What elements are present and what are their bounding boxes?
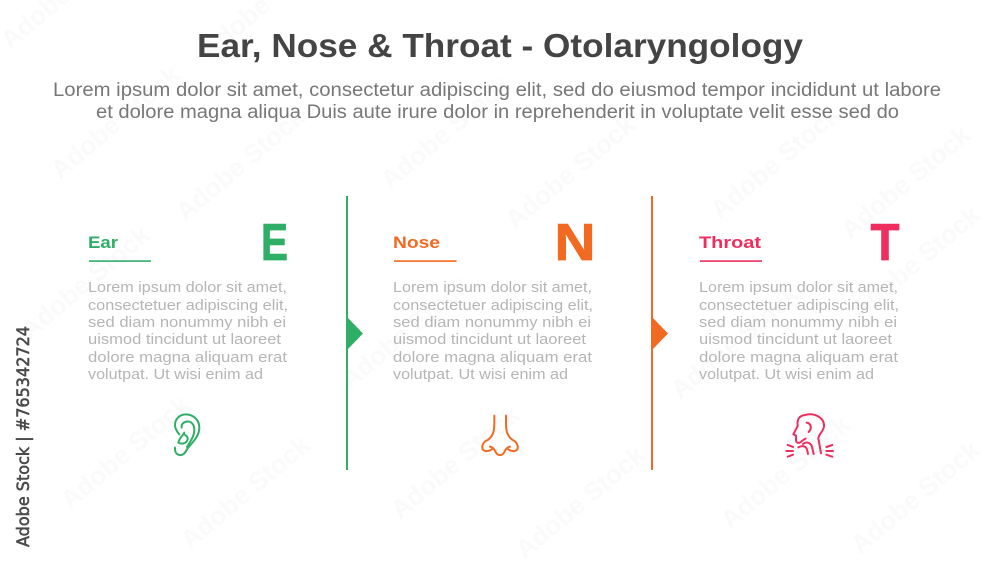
nose body text: Lorem ipsum dolor sit amet, (393, 279, 592, 296)
nose underline (394, 260, 456, 262)
text: Adobe Stock (705, 99, 846, 225)
throat body text: sed diam nonummy nibh ei (699, 314, 897, 331)
text: Adobe Stock (500, 109, 641, 235)
title: Ear, Nose & Throat - Otolaryngology (197, 27, 804, 64)
nose body text: dolore magna aliquam erat (393, 349, 593, 366)
text: Adobe Stock (170, 101, 311, 227)
intro text: Lorem ipsum dolor sit amet, consectetur adipiscing elit, sed do eiusmod tempor incididunt ut labore (53, 80, 941, 101)
text: Adobe Stock (385, 399, 526, 525)
nose body text: consectetuer adipiscing elit, (393, 297, 593, 314)
icon: nose (482, 416, 518, 455)
throat body text: consectetuer adipiscing elit, (699, 297, 899, 314)
text: Adobe Stock (715, 409, 856, 535)
text: Adobe Stock (845, 199, 986, 325)
ear body text: uismod tincidunt ut laoreet (88, 331, 282, 348)
throat heading: Throat (699, 233, 761, 252)
ear heading: Ear (88, 233, 118, 252)
divider: green with arrow (346, 196, 363, 470)
throat underline (700, 260, 762, 262)
side credit: Adobe Stock: Adobe Stock | #765342724 (14, 326, 34, 547)
text: Adobe Stock (55, 389, 196, 515)
throat body text: uismod tincidunt ut laoreet (699, 331, 893, 348)
nose body text: uismod tincidunt ut laoreet (393, 331, 587, 348)
text: Adobe Stock (510, 439, 651, 563)
icon: throat (786, 414, 833, 457)
ear body text: consectetuer adipiscing elit, (88, 297, 288, 314)
letter N: N (554, 214, 596, 272)
intro text: et dolore magna aliqua Duis aute irure dolor in reprehenderit in voluptate velit esse sed do (96, 102, 899, 123)
panel: ear (88, 214, 288, 455)
text: Adobe Stock (665, 279, 806, 405)
ear body text: Lorem ipsum dolor sit amet, (88, 279, 287, 296)
ear body text (88, 279, 288, 383)
ear body text: sed diam nonummy nibh ei (88, 314, 286, 331)
panel: nose (393, 214, 596, 455)
letter E: E (261, 214, 288, 272)
throat body text (699, 279, 899, 383)
text: Adobe Stock (45, 59, 186, 185)
text: Adobe Stock (835, 119, 976, 245)
throat body text: volutpat. Ut wisi enim ad (699, 366, 874, 383)
throat body text: Lorem ipsum dolor sit amet, (699, 279, 898, 296)
divider: orange with arrow (651, 196, 668, 470)
text: Adobe Stock (15, 219, 156, 345)
text: Adobe Stock (375, 69, 516, 195)
nose body text: volutpat. Ut wisi enim ad (393, 366, 568, 383)
nose body text (393, 279, 593, 383)
nose body text: sed diam nonummy nibh ei (393, 314, 591, 331)
text: Adobe Stock (335, 269, 476, 395)
icon: ear (175, 414, 199, 455)
letter T: T (870, 214, 900, 272)
throat body text: dolore magna aliquam erat (699, 349, 899, 366)
panel: throat (699, 214, 900, 457)
nose heading: Nose (393, 233, 440, 252)
text: Adobe Stock (175, 429, 316, 555)
text: Adobe Stock (845, 434, 986, 560)
intro text (53, 80, 941, 123)
ear underline (89, 260, 151, 262)
ear body text: dolore magna aliquam erat (88, 349, 288, 366)
ear body text: volutpat. Ut wisi enim ad (88, 366, 263, 383)
